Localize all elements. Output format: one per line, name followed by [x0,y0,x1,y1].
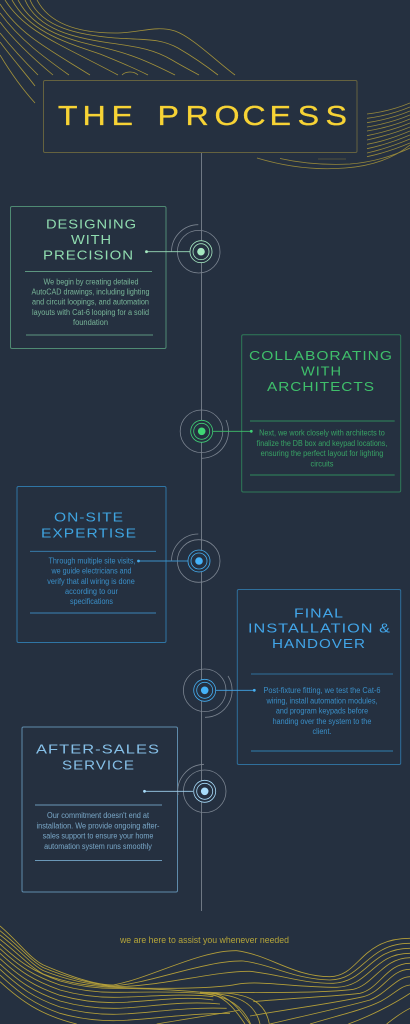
heading: AFTER-SALES [36,743,160,757]
heading: FINAL [294,606,344,620]
body text: we guide electricians and [51,567,132,576]
body text: We begin by creating detailed [44,277,138,286]
body text: and circuit loopings, and automation [32,298,149,307]
node 1 [145,225,220,273]
body text: Next, we work closely with architects to [259,429,385,438]
title: THE PROCESS [58,101,347,131]
body text [257,429,387,468]
heading: ON-SITE [54,510,124,524]
heading: INSTALLATION & [248,622,391,636]
heading [43,218,137,262]
body text [32,277,150,327]
body text: ensuring the perfect layout for lighting [261,449,383,458]
panel: on-site expertise [17,486,166,642]
body text: handing over the system to the [273,717,371,726]
body text: verify that all wiring is done [47,577,135,586]
body text: according to our [65,587,118,596]
panel: after-sales service [22,727,178,892]
body text: foundation [73,318,108,327]
body text [36,811,160,851]
decorative waves: top left [0,0,235,103]
node 5 [143,764,226,813]
heading [41,510,137,540]
node 3 [137,534,220,582]
heading [249,349,393,394]
body text: and program keypads before [276,706,368,716]
body text: circuits [310,460,334,468]
heading: ARCHITECTS [267,380,375,394]
body text: Post-fixture fitting, we test the Cat-6 [264,686,380,695]
body text: Our commitment doesn't end at [47,811,150,820]
body text [264,686,380,736]
node 2 [180,410,253,458]
body text: sales support to ensure your home [43,832,153,840]
heading: WITH [301,364,342,378]
heading [36,743,160,772]
panel: collaborating with architects [242,335,401,492]
panel: final installation and handover [237,590,401,764]
body text [47,556,136,606]
heading: HANDOVER [272,637,366,651]
heading: DESIGNING [46,218,137,232]
heading: EXPERTISE [41,526,137,540]
body text: Through multiple site visits, [48,556,136,566]
body text: installation. We provide ongoing after- [36,821,160,830]
node 4 [183,669,256,717]
body text: finalize the DB box and keypad locations, [257,439,387,448]
heading [248,606,391,651]
title box [44,80,357,152]
body text: wiring, install automation modules, [266,696,378,705]
body text: specifications [70,597,113,606]
body text: automation system runs smoothly [44,842,152,851]
footer tagline: we are here to assist you whenever needed [119,935,289,945]
heading: SERVICE [62,758,135,772]
heading: COLLABORATING [249,349,393,363]
timeline vertical line [200,153,202,911]
decorative waves: bottom [0,926,410,1024]
body text: AutoCAD drawings, including lighting [32,288,150,296]
body text: layouts with Cat-6 looping for a solid [32,308,149,317]
heading: PRECISION [43,248,134,262]
panel: designing with precision [10,206,166,348]
body text: client. [312,727,332,736]
decorative waves: top right [257,103,410,169]
heading: WITH [71,233,112,247]
